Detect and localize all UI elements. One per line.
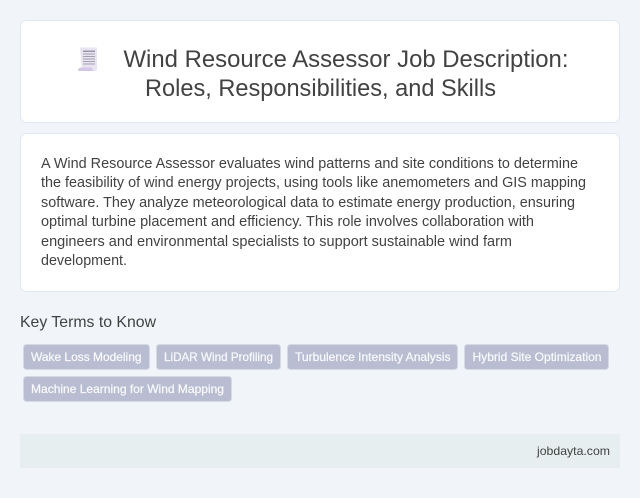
tag: turbulence intensity analysis: Turbulence Intensity Analysis (295, 350, 450, 364)
description text: software. They analyze meteorological data to estimate energy production, ensuring (41, 195, 575, 211)
footer bar (20, 434, 620, 468)
tag: machine learning for wind mapping: Machine Learning for Wind Mapping (31, 382, 224, 396)
heading: key terms: Key Terms to Know (20, 314, 156, 331)
tag: wake loss modeling: Wake Loss Modeling (31, 350, 142, 364)
tag: hybrid site optimization (464, 344, 608, 370)
description text: development. (41, 253, 127, 269)
tag: lidar wind profiling (156, 344, 280, 370)
title: Wind Resource Assessor Job Description: (124, 46, 568, 73)
panel: title card (20, 20, 620, 122)
tag: hybrid site optimization: Hybrid Site Optimization (472, 350, 602, 364)
tag: lidar wind profiling: LiDAR Wind Profiling (164, 350, 273, 364)
description text (41, 156, 586, 269)
icon: document scroll (78, 48, 97, 71)
description text: A Wind Resource Assessor evaluates wind patterns and site conditions to determine (41, 156, 578, 172)
description text: the feasibility of wind energy projects, using tools like anemometers and GIS mapping (41, 175, 586, 191)
description text: engineers and environmental specialists to support sustainable wind farm (41, 234, 512, 250)
tag: machine learning for wind mapping (24, 376, 232, 402)
title (124, 46, 568, 102)
description text: optimal turbine placement and efficiency. This role involves collaboration with (41, 214, 534, 230)
panel: description card (20, 134, 620, 292)
tag: turbulence intensity analysis (288, 344, 458, 370)
title: Roles, Responsibilities, and Skills (145, 75, 496, 102)
tag: wake loss modeling (24, 344, 150, 370)
footer source text: jobdayta.com (536, 444, 610, 458)
